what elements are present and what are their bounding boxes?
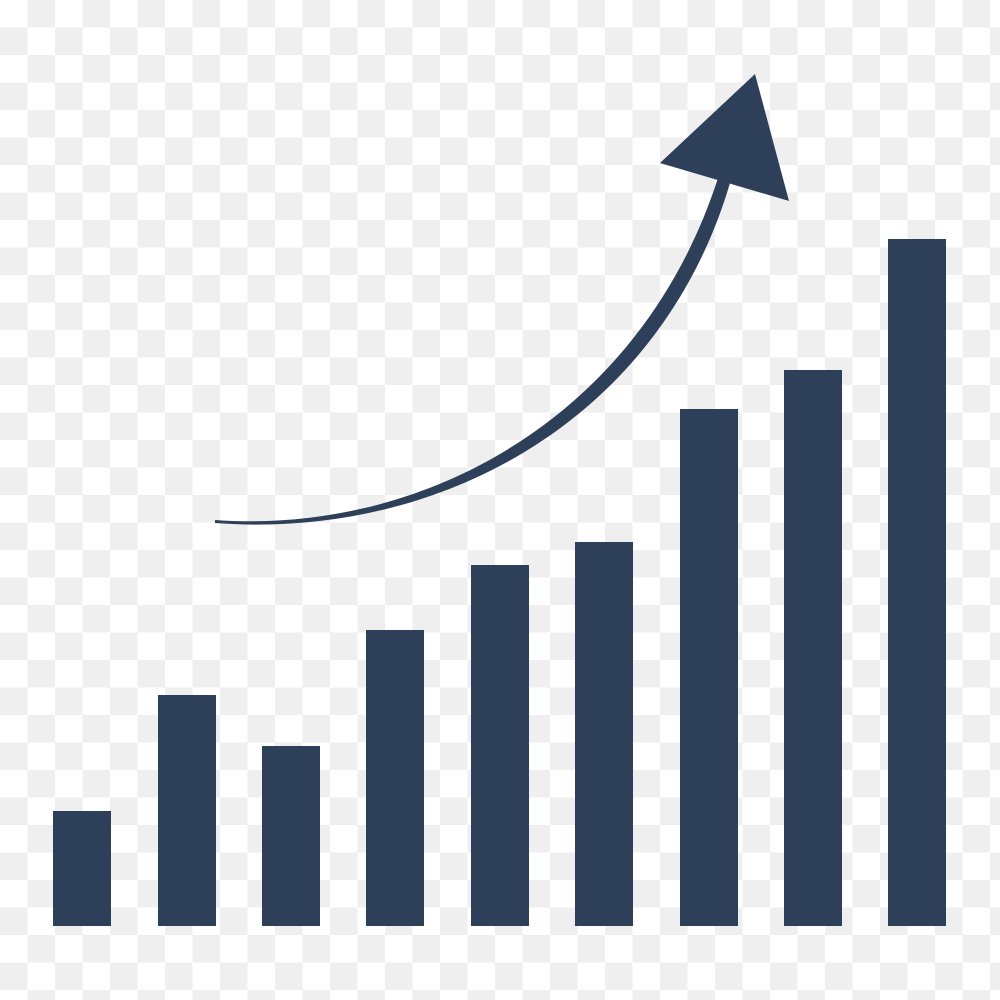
bar chart [53,239,946,926]
arrow: rising trend [215,74,789,525]
